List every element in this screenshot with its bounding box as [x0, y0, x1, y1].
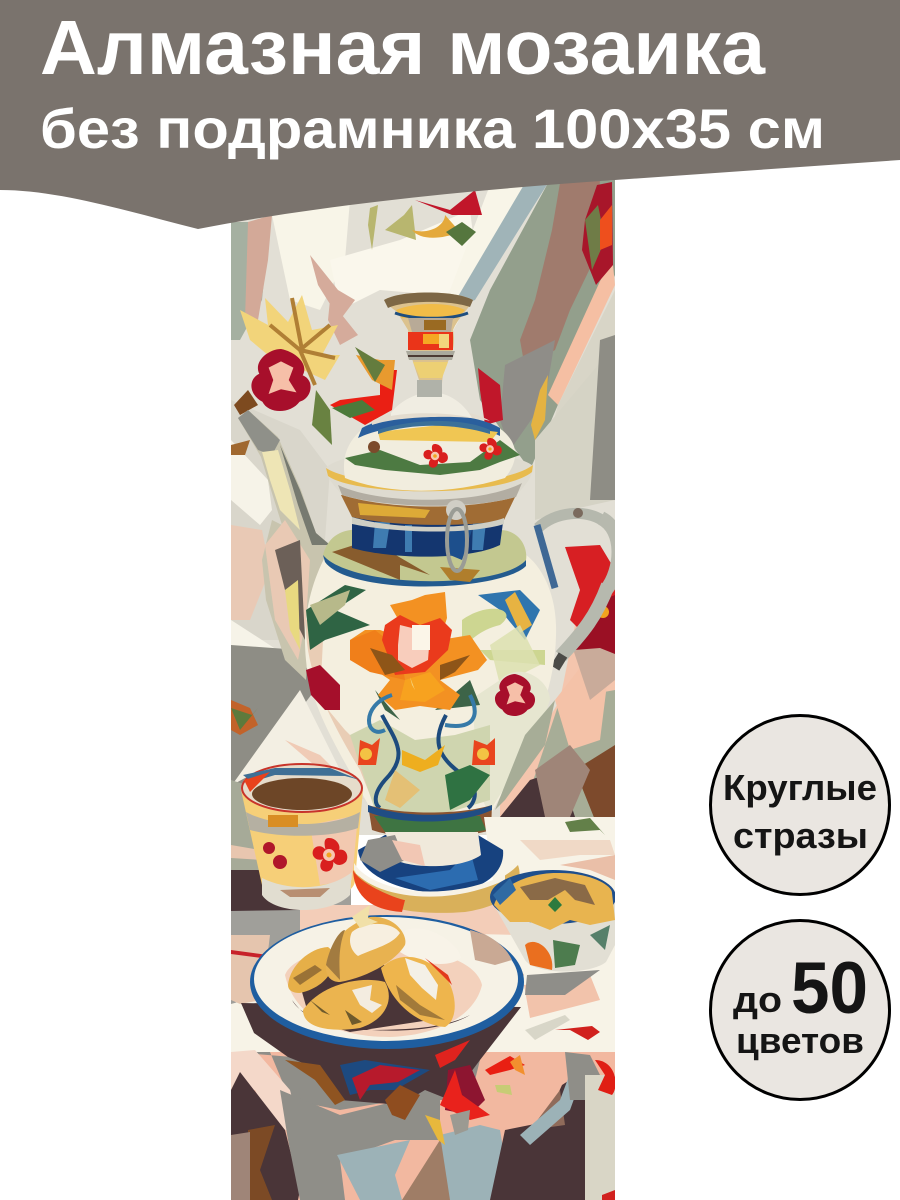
- badge: up to 50 colours: 50: [791, 948, 868, 1029]
- pastries on plate: [288, 905, 461, 1030]
- teapot spout: [238, 410, 334, 680]
- title line 1: Алмазная мозаика: [40, 5, 766, 91]
- bowl with pastries: [490, 870, 616, 972]
- badge: up to 50 colours: до: [733, 979, 782, 1020]
- lower drape: [231, 1050, 616, 1200]
- shadow under plate with ornament: [241, 1003, 525, 1145]
- badge: round rhinestones: [710, 716, 890, 894]
- teapot handle: [537, 508, 619, 668]
- lid flange: [342, 460, 532, 506]
- gold band: [341, 495, 516, 525]
- lid dome: [344, 419, 515, 491]
- teapot foot: [353, 832, 520, 913]
- central flower: [350, 592, 487, 710]
- blue collar: [352, 515, 504, 557]
- badge: up to 50 colours: [710, 920, 890, 1100]
- teapot body: [305, 555, 556, 838]
- glass: [241, 763, 363, 910]
- body base band: [368, 805, 492, 834]
- painting floral accents: [231, 182, 615, 730]
- teapot shoulder, collar and lid: [323, 392, 533, 586]
- shoulder rim: [323, 529, 526, 584]
- header banner: [0, 0, 900, 229]
- teapot finial: [384, 292, 473, 397]
- title line 2: без подрамника 100х35 см: [40, 97, 825, 160]
- yellow flower: [240, 295, 340, 380]
- badge: up to 50 colours: цветов: [736, 1020, 864, 1061]
- painting: teapot still life: [231, 175, 619, 1200]
- tablecloth and shadows: [231, 780, 615, 1052]
- side flowers and vines: [306, 665, 535, 810]
- badge: round rhinestones: стразы: [733, 815, 868, 856]
- plate: [250, 915, 524, 1049]
- teapot ring: [446, 500, 467, 571]
- painting background drapery: [231, 175, 615, 1005]
- badge: round rhinestones: Круглые: [723, 767, 877, 808]
